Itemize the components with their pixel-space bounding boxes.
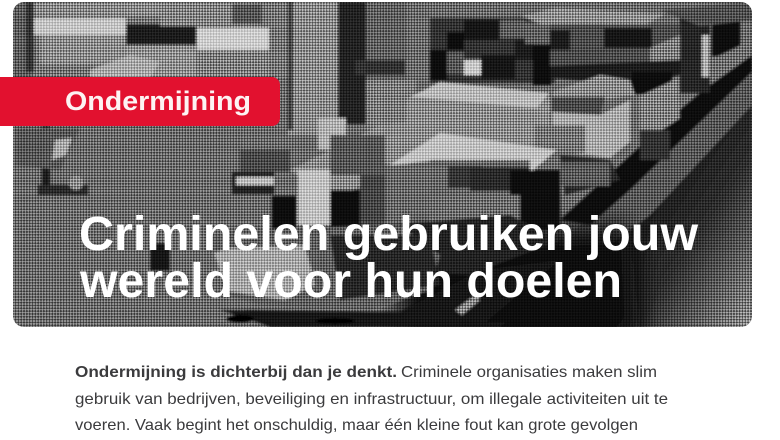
intro paragraph: Criminele organisaties maken slim [401, 364, 657, 381]
intro paragraph [75, 364, 668, 434]
intro paragraph: voeren. Vaak begint het onschuldig, maar één kleine fout kan grote gevolgen [75, 417, 638, 434]
photo: container ship in harbour with halftone screen [13, 0, 752, 340]
halftone screen [13, 2, 752, 327]
red banner [0, 77, 280, 126]
intro paragraph: gebruik van bedrijven, beveiliging en infrastructuur, om illegale activiteiten uit te [75, 391, 668, 408]
intro paragraph: Ondermijning is dichterbij dan je denkt. [75, 364, 397, 381]
container stacks [430, 2, 752, 160]
crane column and tower [288, 0, 430, 200]
bridge and superstructure [272, 135, 385, 240]
truck and ground details left [15, 126, 290, 195]
title: wereld voor hun doelen [79, 255, 622, 308]
foredeck and bow [149, 214, 558, 327]
title: Criminelen gebruiken jouw [79, 208, 699, 261]
mid deck containers [385, 75, 635, 230]
water and hull [400, 40, 752, 340]
title [79, 208, 699, 308]
quay buildings top left [13, 2, 293, 78]
banner label: Ondermijning [65, 86, 251, 116]
